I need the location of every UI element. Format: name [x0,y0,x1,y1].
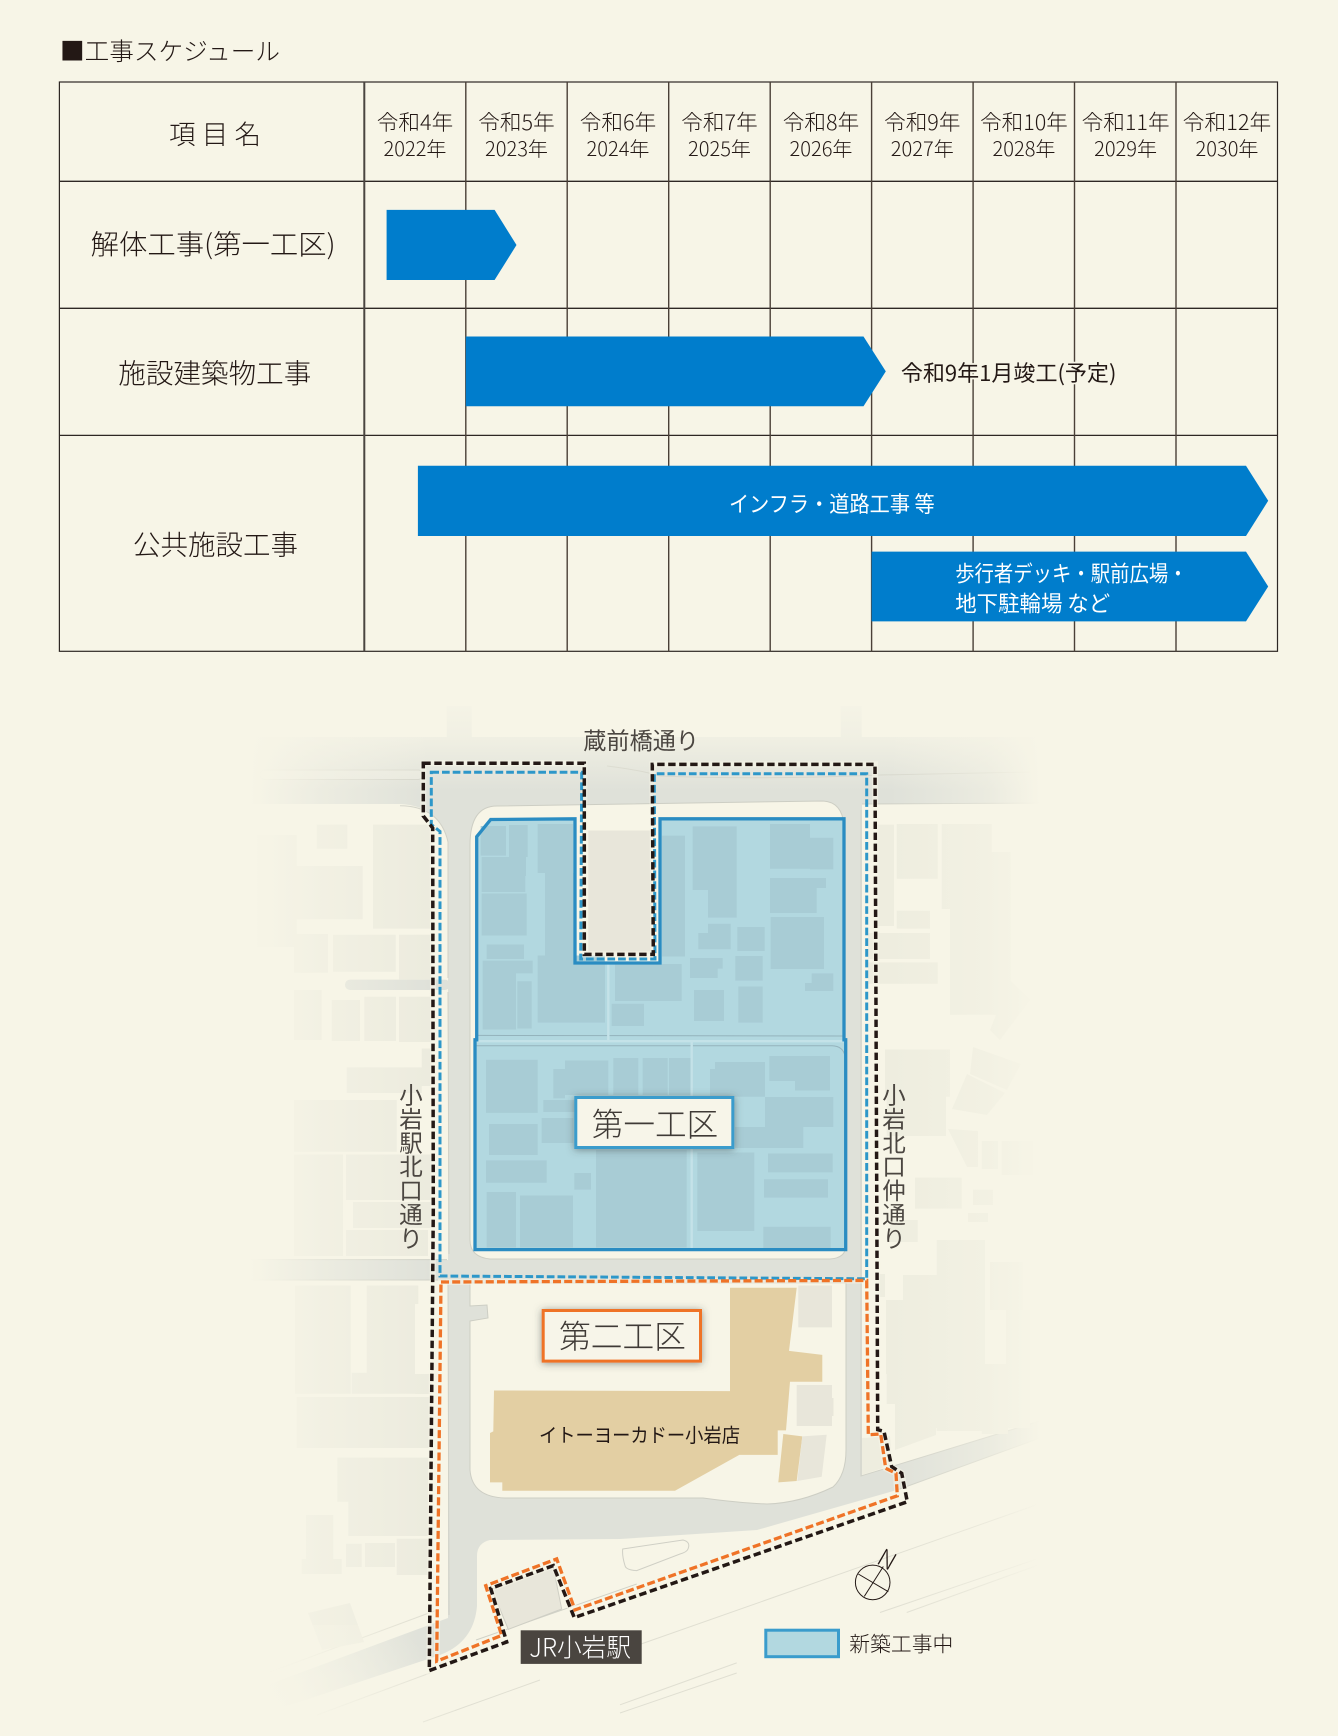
header: year columns: 令和5年 [478,106,555,137]
zone one buildings [481,824,833,1248]
header: year columns: 2030年 [1196,133,1258,162]
bar label: pedestrian deck line 2: 地下駐輪場 など [955,586,1110,618]
compass [855,1538,904,1600]
row label: demolition: 解体工事(第一工区) [91,222,336,262]
surrounding buildings east [862,824,1033,1475]
map edge fades [0,680,1338,1736]
block outline: second zone [470,1283,846,1504]
label: zone two: 第二工区 [559,1311,686,1358]
header: year columns: 2024年 [586,133,650,162]
header: year columns: 2022年 [384,133,446,162]
header: year columns: 2029年 [1094,133,1157,162]
row label: facility construction: 施設建築物工事 [118,351,311,391]
grey buildings in zone two [797,1286,834,1481]
store label: イトーヨーカドー小岩店 [539,1419,740,1448]
building: notch plot [588,830,652,954]
surrounding buildings west [257,825,432,1650]
header: year columns: 令和8年 [783,106,859,137]
block outline: first zone [470,801,846,1259]
label: JR Koiwa station: JR小岩駅 [529,1628,631,1664]
header: year columns: 令和9年 [884,106,960,137]
store annex [778,1434,802,1482]
header: year columns: 令和11年 [1082,106,1170,137]
street label: Koiwa north exit naka-dori: 小岩北口仲通り [882,1076,906,1254]
table grid [59,82,1277,651]
legend swatch [766,1630,838,1657]
header: year columns [377,106,1271,162]
zone one new construction area [475,819,846,1250]
title: ■工事スケジュール [60,33,280,68]
header: year columns: 令和6年 [580,106,656,137]
header: year columns: 令和10年 [980,106,1068,137]
boundary: black dashed whole project [423,763,907,1671]
header: year columns: 令和12年 [1183,106,1271,137]
header: item name: 項目名 [169,113,261,152]
header: year columns: 令和4年 [377,106,453,137]
arrow bar: pedestrian deck etc [872,552,1268,621]
header: year columns: 2023年 [485,133,548,162]
header: year columns: 2028年 [992,133,1056,162]
arrow bar: demolition [387,210,516,280]
building: JR Koiwa station [492,1567,562,1629]
panel: schedule table [59,82,1277,651]
label: zone one: 第一工区 [592,1099,718,1146]
street label: Kuramaebashi-dori: 蔵前橋通り [583,722,699,756]
row label: public facilities: 公共施設工事 [133,523,298,563]
header: year columns: 2026年 [790,133,852,162]
arrow bar: facility construction [466,336,886,406]
boundary halos [423,763,907,1671]
panel: site map [0,680,1338,1736]
header: year columns: 2025年 [688,133,751,162]
legend text: 新築工事中 [849,1628,953,1658]
boundary: orange dashed zone two [437,1280,897,1661]
roads [230,705,1040,1722]
header: year columns: 令和7年 [681,106,758,137]
header: year columns: 2027年 [891,133,954,162]
road medians and edges [250,766,1040,1722]
building: Ito-Yokado store [490,1288,822,1491]
arrow bar: infrastructure and roads [418,466,1268,536]
street label: Koiwa station north exit road: 小岩駅北口通り [399,1076,423,1254]
compass north letter: N [872,1538,904,1577]
completion note: 令和9年1月竣工(予定) [901,356,1116,388]
boundary: blue dashed zone one [431,772,867,1279]
legend [766,1628,953,1658]
bar label: pedestrian deck line 1: 歩行者デッキ・駅前広場・ [955,557,1188,589]
bar label: infrastructure: インフラ・道路工事 等 [729,487,935,519]
